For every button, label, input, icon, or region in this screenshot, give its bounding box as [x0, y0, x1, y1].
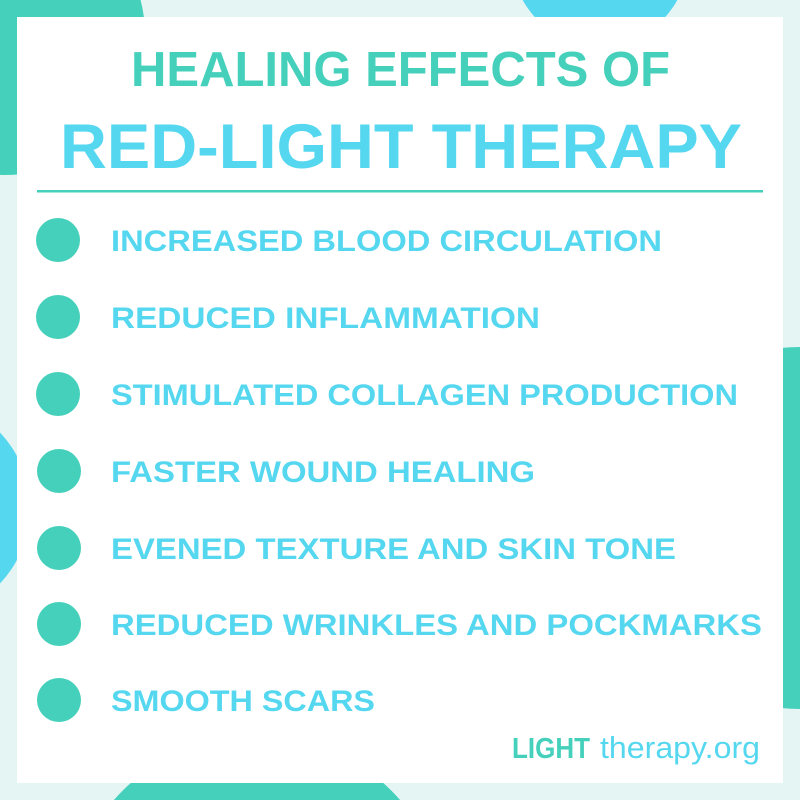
item 5: EVENED TEXTURE AND SKIN TONE	[111, 533, 676, 566]
logo: LIGHT	[512, 733, 590, 765]
item 4: FASTER WOUND HEALING	[111, 456, 535, 489]
item 1: INCREASED BLOOD CIRCULATION	[111, 225, 662, 258]
item 6	[37, 602, 762, 646]
item 4	[37, 449, 535, 493]
item 3	[36, 372, 738, 416]
item 2	[36, 295, 540, 339]
item 2: REDUCED INFLAMMATION	[111, 302, 540, 335]
divider	[37, 190, 763, 192]
logo	[512, 730, 760, 765]
title line 1: HEALING EFFECTS OF	[131, 43, 670, 97]
list of effects	[36, 218, 762, 722]
item 7	[37, 678, 375, 722]
title line 2: RED-LIGHT THERAPY	[60, 112, 742, 182]
logo: therapy.org	[600, 730, 760, 765]
item 3: STIMULATED COLLAGEN PRODUCTION	[111, 379, 738, 412]
item 5	[37, 526, 676, 570]
item 1	[36, 218, 662, 262]
item 7: SMOOTH SCARS	[111, 685, 375, 718]
item 6: REDUCED WRINKLES AND POCKMARKS	[111, 609, 762, 642]
